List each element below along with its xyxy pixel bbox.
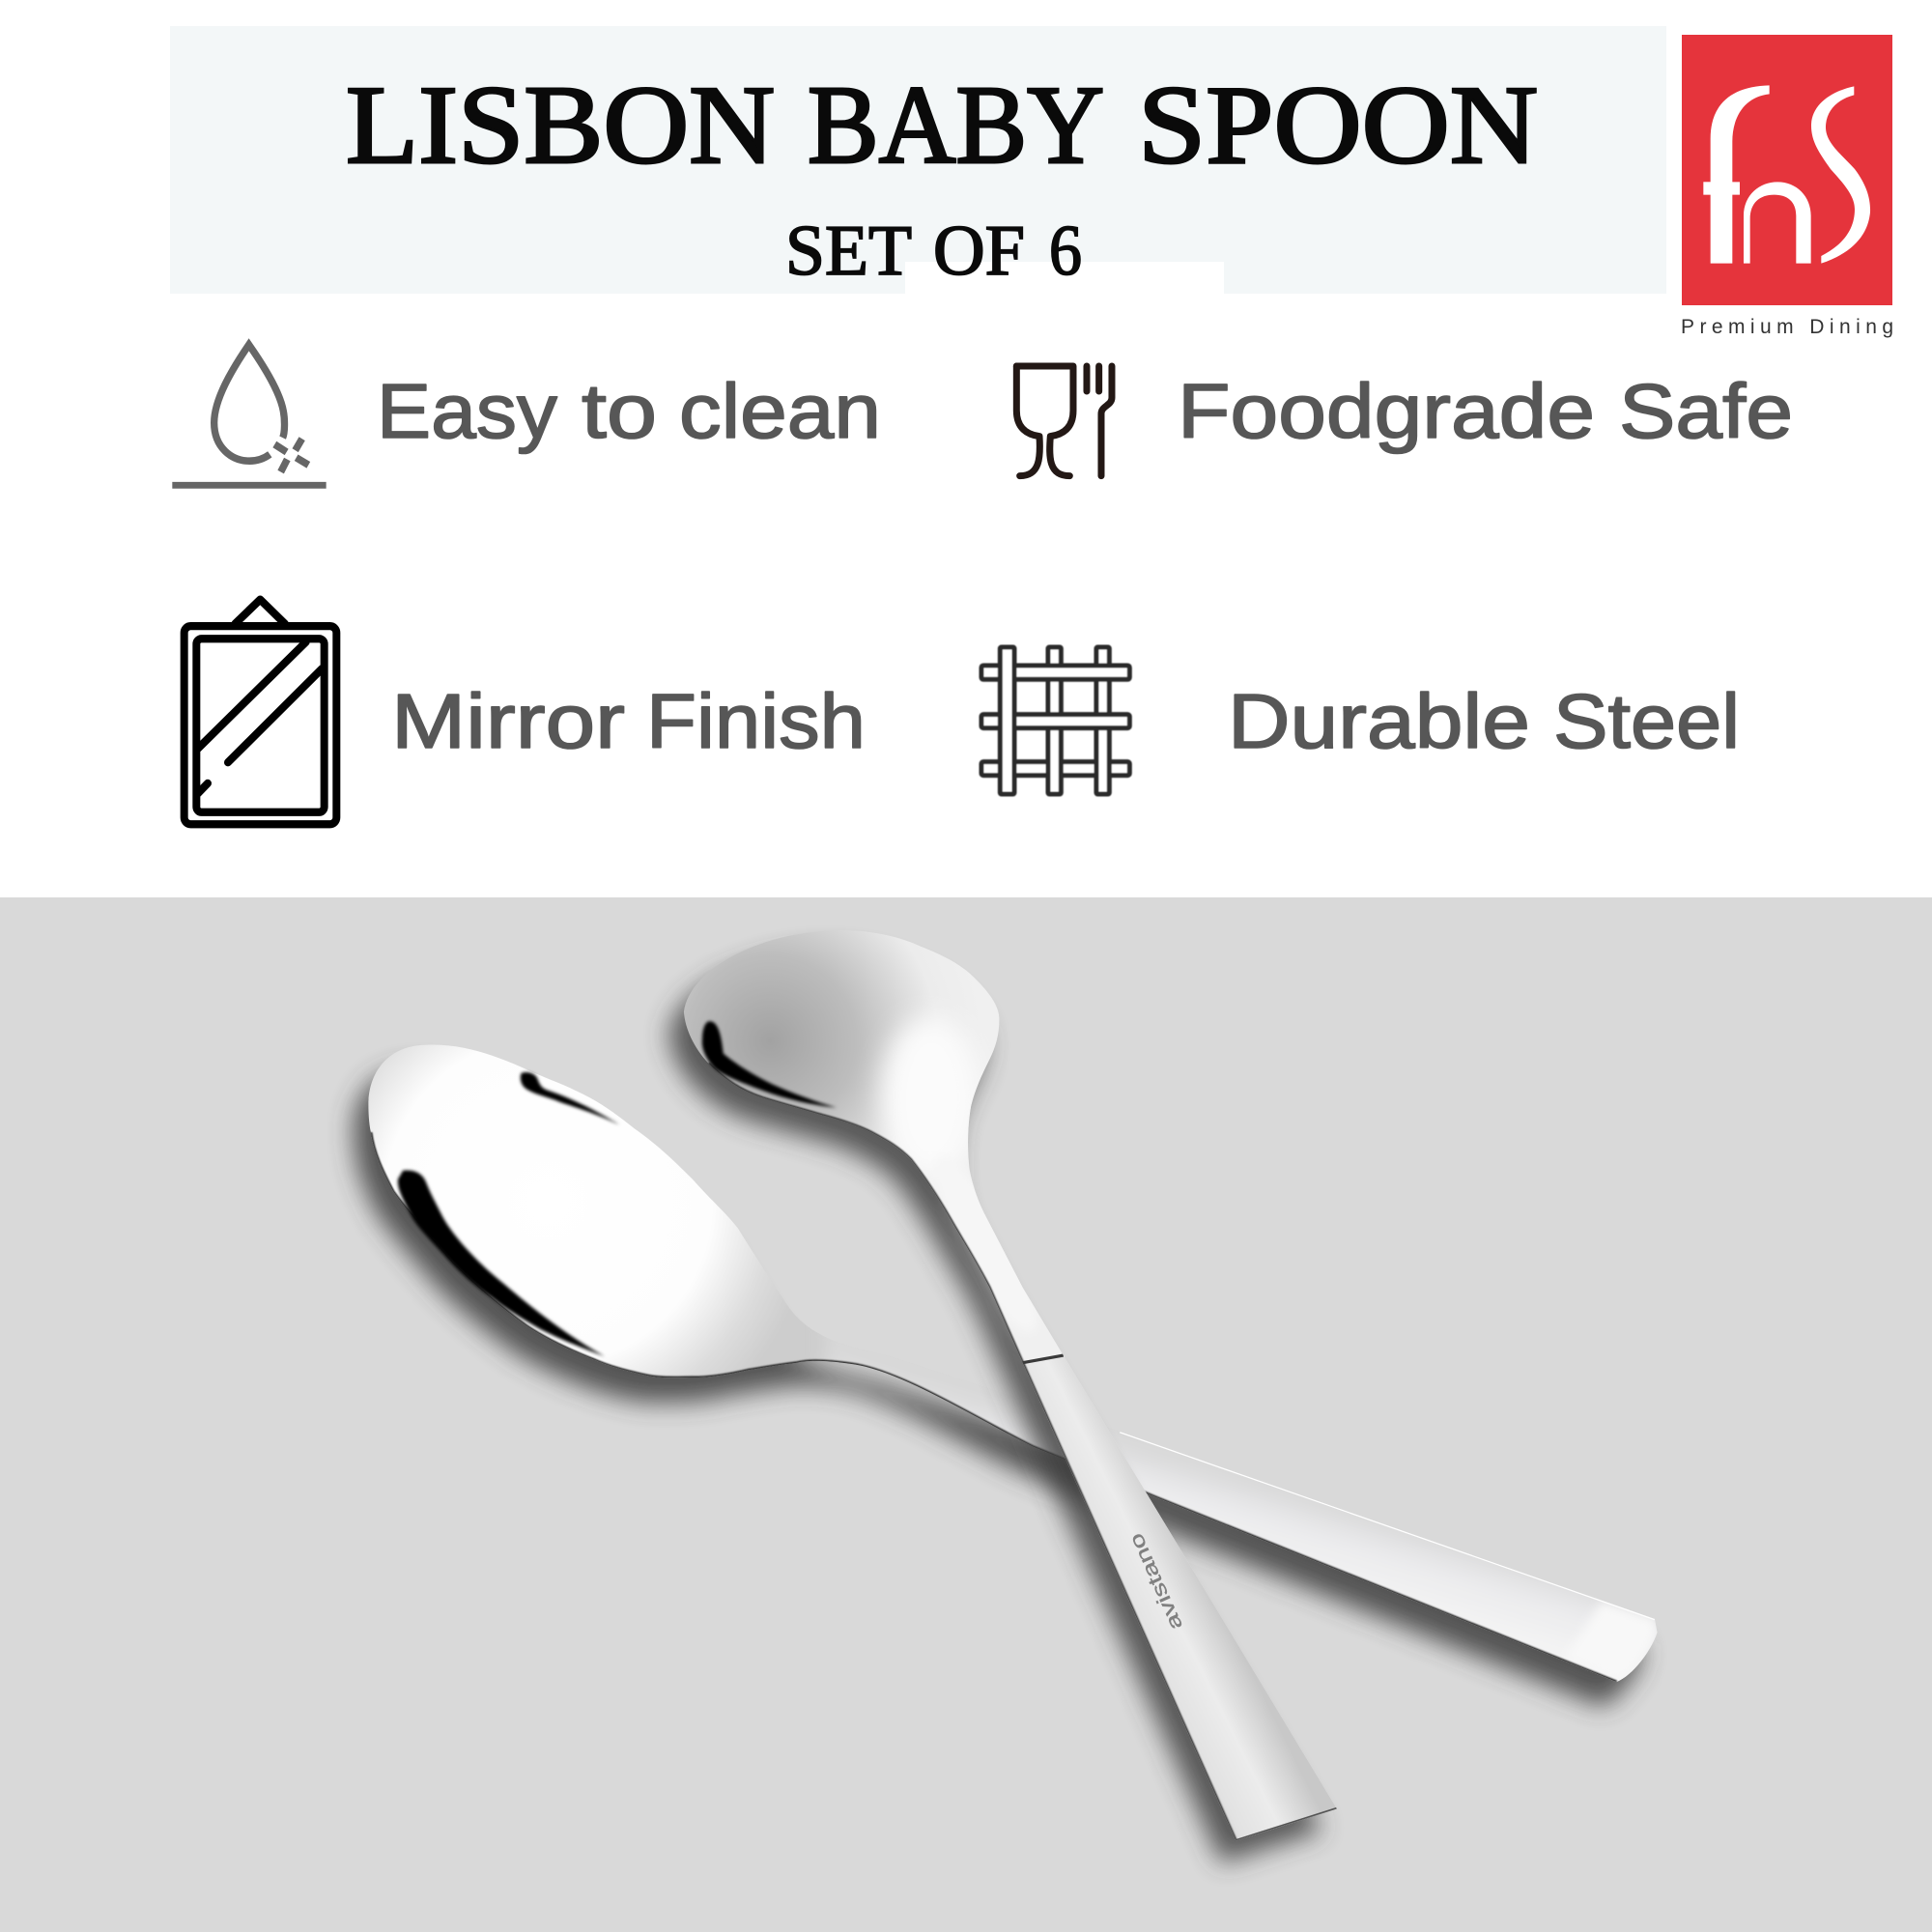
title: Lisbon Baby Spoon: BABY [808, 64, 1104, 187]
icon: wine glass and fork [1016, 366, 1112, 476]
photo panel: grey backdrop [0, 897, 1932, 1932]
title: Lisbon Baby Spoon: LISBON [346, 64, 775, 187]
subtitle: Set of 6 [785, 212, 1082, 291]
right spoon [669, 930, 1343, 1863]
label: Durable Steel: Durable [1228, 678, 1530, 764]
title: Lisbon Baby Spoon: SPOON [1138, 64, 1538, 187]
label: Durable Steel: Steel [1553, 678, 1740, 764]
label: Easy to clean: Easy [377, 368, 557, 454]
label: Easy to clean: to [582, 368, 657, 454]
subtitle: Set of 6: OF [933, 212, 1025, 291]
label: Easy to clean: clean [679, 368, 881, 454]
label: Mirror Finish [391, 678, 866, 764]
title banner [170, 26, 1666, 294]
icon: water drop [172, 345, 327, 489]
logo: fnS Premium Dining: Premium Dining [1681, 316, 1893, 338]
icon: mirror [185, 600, 336, 824]
subtitle: Set of 6: 6 [1049, 212, 1082, 291]
label: Foodgrade Safe: Safe [1619, 368, 1793, 454]
engraved handle mark: avistano [1125, 1530, 1187, 1634]
reflection: black bowl streaks [398, 1072, 620, 1356]
label: Mirror Finish: Finish [646, 678, 866, 764]
subtitle: Set of 6: SET [785, 212, 912, 291]
photo: crossed spoons [354, 930, 1725, 1863]
title: Lisbon Baby Spoon [346, 64, 1538, 187]
left spoon [354, 1045, 1725, 1749]
label: Foodgrade Safe: Foodgrade [1178, 368, 1595, 454]
label: Mirror Finish: Mirror [391, 678, 625, 764]
reflection: black crescent [702, 1021, 837, 1108]
label: Foodgrade Safe [1178, 368, 1793, 454]
label: Durable Steel [1228, 678, 1740, 764]
icon: woven steel mesh [981, 647, 1129, 794]
label: Easy to clean [377, 368, 881, 454]
logo: fnS Premium Dining [1681, 35, 1893, 338]
